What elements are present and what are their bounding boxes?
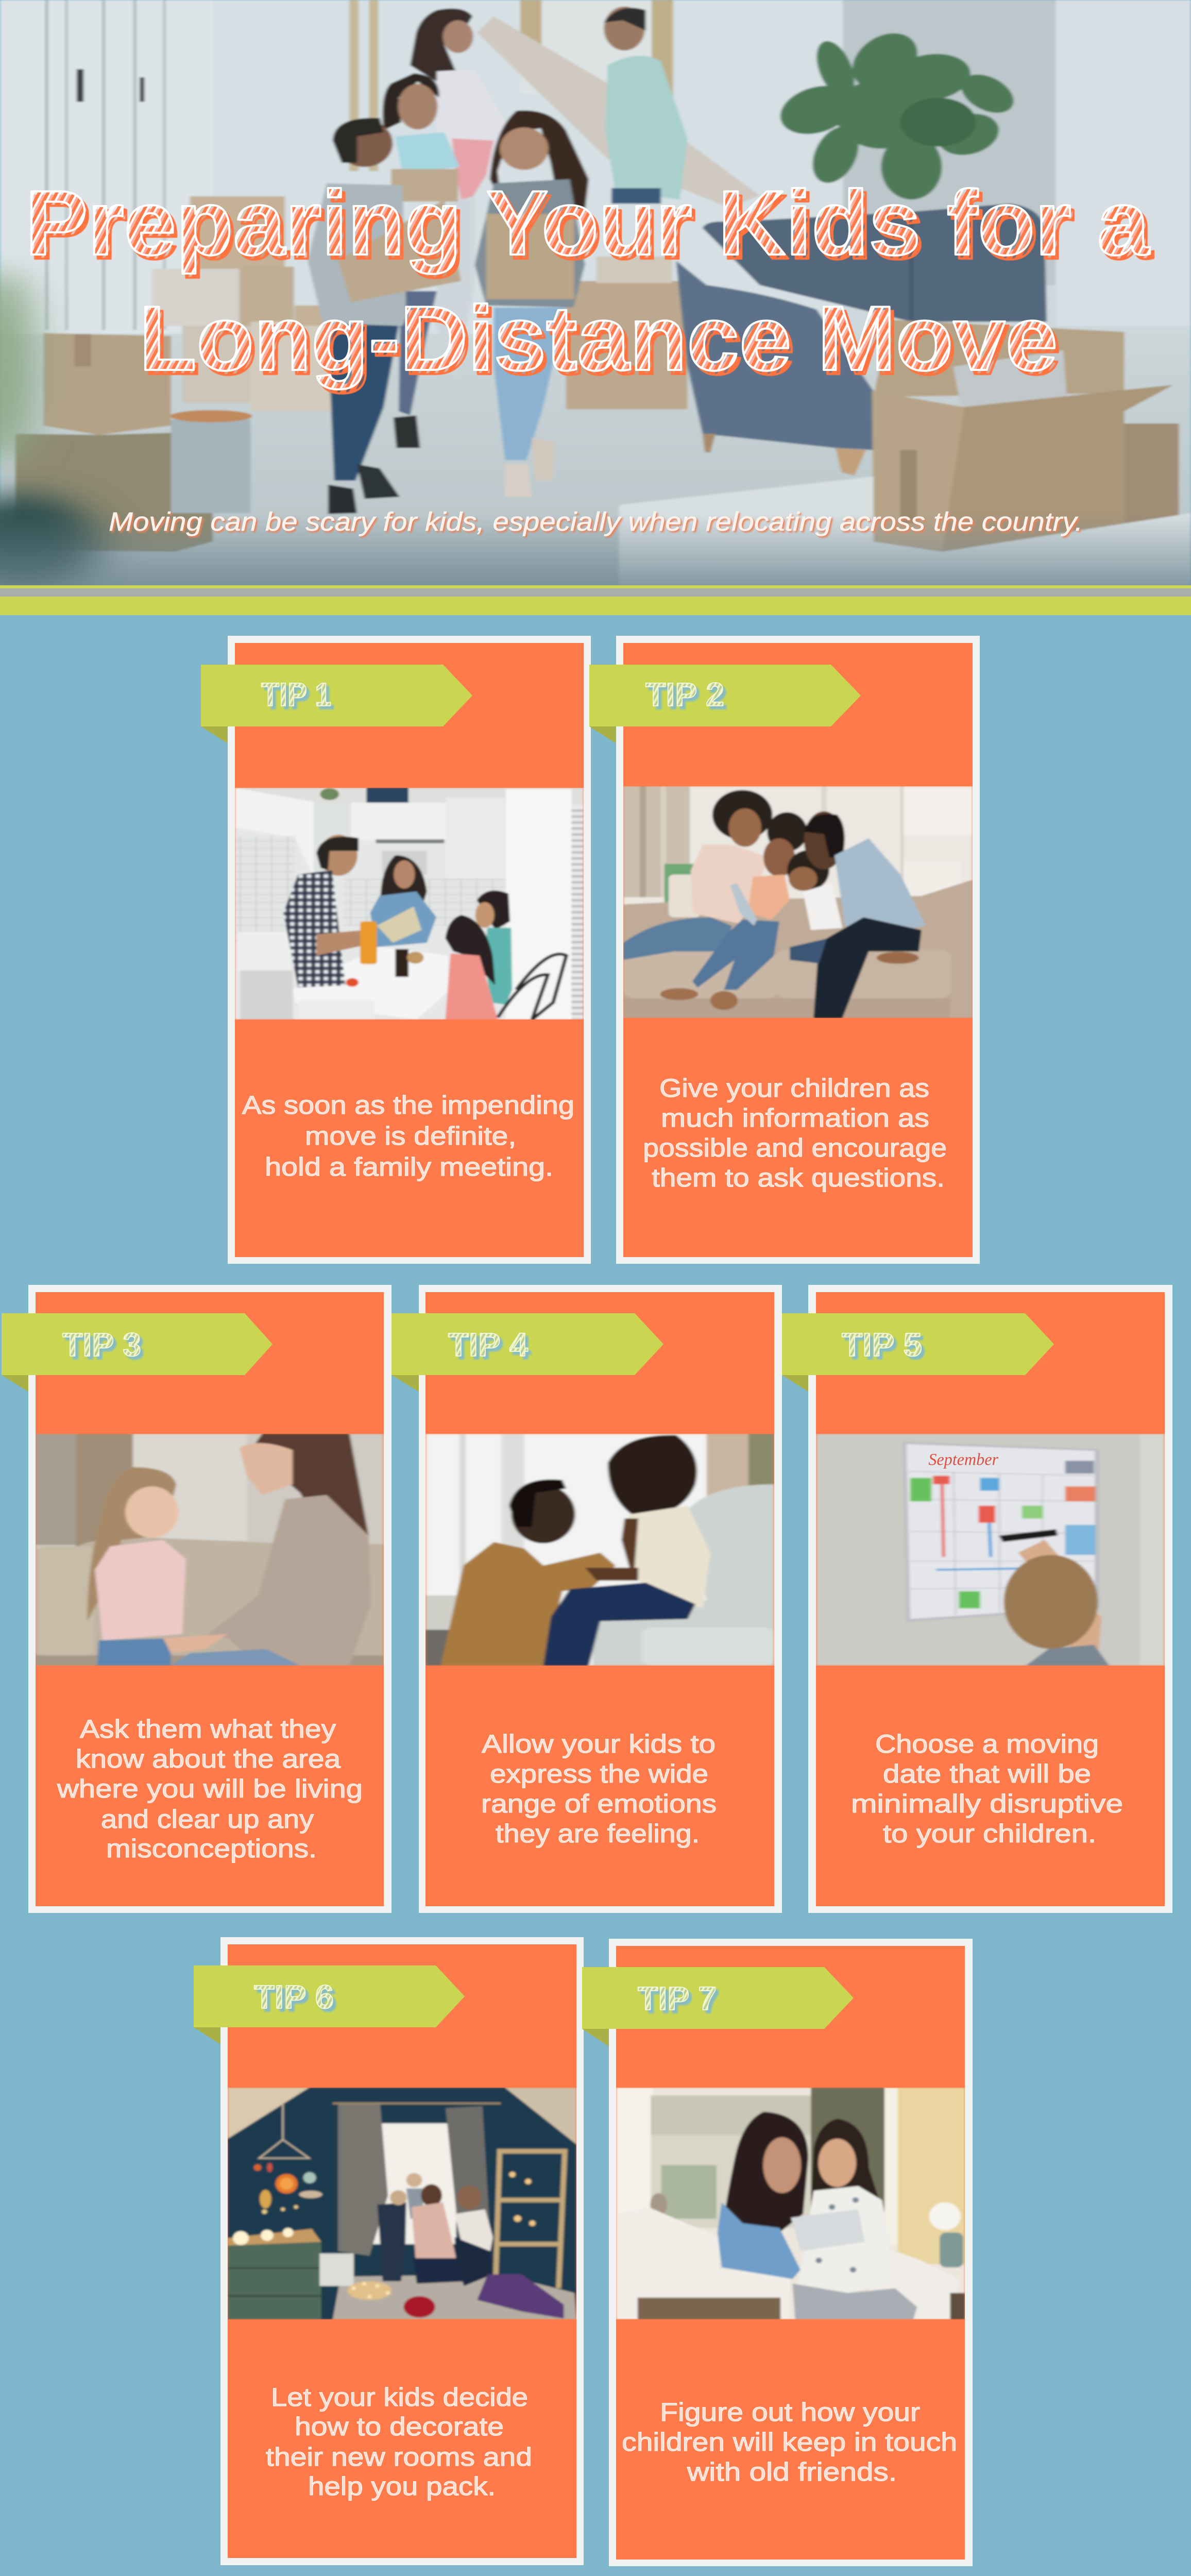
title bbox=[25, 172, 1150, 389]
chair bbox=[498, 954, 566, 1020]
tip 3 text: Ask them what they bbox=[80, 1715, 336, 1743]
father bbox=[512, 1485, 575, 1544]
panel: tip 4 bbox=[392, 1285, 782, 1913]
tip 3 text: and clear up any bbox=[101, 1805, 314, 1834]
tip 1 orange panel bbox=[235, 643, 584, 1257]
mother bbox=[712, 790, 772, 840]
tip 4 text: they are feeling. bbox=[496, 1819, 700, 1848]
man bbox=[319, 835, 358, 876]
girl bbox=[811, 2119, 879, 2200]
woman bbox=[722, 2112, 808, 2232]
flowers bbox=[929, 2202, 961, 2230]
tip 1 photo: family in kitchen bbox=[235, 788, 584, 1020]
tip 1 text: move is definite, bbox=[305, 1122, 516, 1150]
tip 4 text: Allow your kids to bbox=[482, 1730, 716, 1758]
tip 7 card frame bbox=[609, 1939, 973, 2566]
tip 5 ribbon bbox=[782, 1313, 1054, 1392]
tip 7 ribbon bbox=[582, 1967, 854, 2046]
panel: tip 2 bbox=[589, 636, 980, 1264]
tip 4 ribbon bbox=[392, 1313, 663, 1392]
back boxes bbox=[190, 196, 285, 269]
tip 4 orange panel bbox=[426, 1292, 774, 1906]
boy bbox=[336, 120, 393, 167]
tip 5 photo: child writing on calendar bbox=[816, 1434, 1165, 1666]
tip 5 text: minimally disruptive bbox=[851, 1789, 1123, 1818]
front girl bbox=[490, 110, 589, 212]
green blurred foreground and dark bottom bbox=[0, 269, 1191, 599]
tip 7 text: children will keep in touch bbox=[622, 2428, 957, 2456]
father bbox=[804, 811, 844, 870]
tip 1 text: hold a family meeting. bbox=[265, 1153, 553, 1181]
tip 2 text: much information as bbox=[661, 1104, 929, 1132]
tip 7 text: Figure out how your bbox=[660, 2398, 920, 2427]
dresser bbox=[228, 2242, 321, 2319]
tip 2 card frame bbox=[616, 636, 980, 1264]
calendar heading: September bbox=[928, 1450, 998, 1469]
panel: tip 5 bbox=[782, 1285, 1172, 1913]
tip 6 label: TIP 6 bbox=[254, 1978, 334, 2015]
tip 6 text: their new rooms and bbox=[266, 2443, 532, 2471]
tip 6 ribbon bbox=[194, 1965, 465, 2044]
daughter bbox=[767, 812, 807, 852]
girl bbox=[87, 1467, 176, 1621]
tip 4 card frame bbox=[419, 1285, 782, 1913]
tip 6 text: help you pack. bbox=[308, 2472, 496, 2501]
tip 4 text: express the wide bbox=[490, 1759, 708, 1788]
tip 3 orange panel bbox=[36, 1292, 384, 1906]
tip 5 text: date that will be bbox=[883, 1759, 1091, 1788]
bed bbox=[333, 2275, 576, 2319]
tip 5 orange panel bbox=[816, 1292, 1165, 1906]
tip 6 text bbox=[266, 2383, 532, 2501]
tip 2 orange panel bbox=[623, 643, 973, 1257]
title: Preparing Your Kids for a bbox=[25, 172, 1150, 274]
tip 1 text: As soon as the impending bbox=[242, 1091, 574, 1120]
tip 3 text: misconceptions. bbox=[106, 1834, 317, 1863]
woman bbox=[410, 9, 472, 96]
man bbox=[604, 7, 645, 50]
panel: tip 3 bbox=[2, 1285, 392, 1913]
hero photo: family carrying moving boxes bbox=[0, 0, 1191, 597]
tip 3 label: TIP 3 bbox=[62, 1326, 141, 1363]
tip 1 ribbon bbox=[201, 665, 472, 743]
tip 3 text: where you will be living bbox=[57, 1774, 363, 1803]
toddler bbox=[787, 850, 829, 890]
tip 6 text: how to decorate bbox=[295, 2412, 504, 2441]
tip 3 ribbon bbox=[2, 1313, 273, 1392]
tip 3 text: know about the area bbox=[76, 1744, 341, 1773]
sofa and armchair bbox=[703, 204, 1047, 321]
divider: thin green line bbox=[0, 585, 1191, 588]
tip 2 text: them to ask questions. bbox=[652, 1163, 945, 1192]
tip 5 label: TIP 5 bbox=[842, 1326, 922, 1363]
girl bbox=[445, 915, 495, 986]
child bbox=[608, 1435, 697, 1518]
tip 4 text: range of emotions bbox=[481, 1789, 717, 1818]
title: Long-Distance Move bbox=[139, 287, 1058, 389]
boy bbox=[477, 890, 510, 930]
tip 4 label: TIP 4 bbox=[448, 1326, 528, 1363]
woman bbox=[381, 855, 427, 909]
tip 5 text bbox=[851, 1730, 1123, 1848]
tip 6 text: Let your kids decide bbox=[271, 2383, 528, 2412]
tip 3 text bbox=[57, 1715, 363, 1863]
tip 5 text: Choose a moving bbox=[875, 1730, 1099, 1758]
tip 4 text bbox=[481, 1730, 717, 1848]
mobile bbox=[254, 2103, 322, 2214]
tip 2 text: possible and encourage bbox=[643, 1133, 947, 1162]
rolled carpet bbox=[477, 16, 759, 208]
tip 5 text: to your children. bbox=[883, 1819, 1096, 1848]
tip 2 photo: family on sofa bbox=[623, 786, 973, 1018]
tip 3 photo: mother and daughter talking bbox=[36, 1434, 384, 1666]
tip 7 label: TIP 7 bbox=[638, 1980, 717, 2017]
tip 2 text bbox=[643, 1074, 947, 1192]
tip 2 text: Give your children as bbox=[659, 1074, 929, 1103]
tip 7 text bbox=[622, 2398, 957, 2486]
subtitle: Moving can be scary for kids, especially when relocating across the country. bbox=[109, 507, 1083, 536]
tip 6 card frame bbox=[220, 1937, 584, 2565]
sofa bbox=[616, 2207, 790, 2319]
panel: tip 1 bbox=[201, 636, 591, 1264]
back girl bbox=[383, 73, 439, 130]
tip 1 text bbox=[242, 1091, 574, 1181]
tip 5 card frame bbox=[808, 1285, 1172, 1913]
tip 2 label: TIP 2 bbox=[645, 676, 724, 713]
tip 2 ribbon bbox=[589, 665, 861, 743]
plant bbox=[767, 29, 1024, 199]
people bbox=[378, 2202, 406, 2281]
tip 1 label: TIP 1 bbox=[261, 676, 331, 713]
panel: tip 7 bbox=[582, 1939, 973, 2566]
mother bbox=[251, 1434, 368, 1540]
tip 3 card frame bbox=[28, 1285, 392, 1913]
tip 7 photo: mother and daughter with tablet bbox=[616, 2088, 965, 2319]
tip 7 text: with old friends. bbox=[687, 2458, 897, 2486]
tip 6 photo: family in bedroom bbox=[228, 2088, 576, 2319]
tip 4 photo: father comforting child bbox=[426, 1434, 774, 1666]
divider: green band bbox=[0, 597, 1191, 615]
shelves bbox=[496, 2149, 567, 2289]
right big box bbox=[874, 319, 1124, 397]
tip 1 card frame bbox=[228, 636, 591, 1264]
pillow and hat bbox=[477, 2275, 564, 2318]
child bbox=[1018, 1540, 1064, 1574]
left boxes bbox=[43, 333, 171, 435]
panel: tip 6 bbox=[194, 1937, 584, 2565]
tip 6 orange panel bbox=[228, 1944, 576, 2558]
tip 7 orange panel bbox=[616, 1946, 965, 2560]
